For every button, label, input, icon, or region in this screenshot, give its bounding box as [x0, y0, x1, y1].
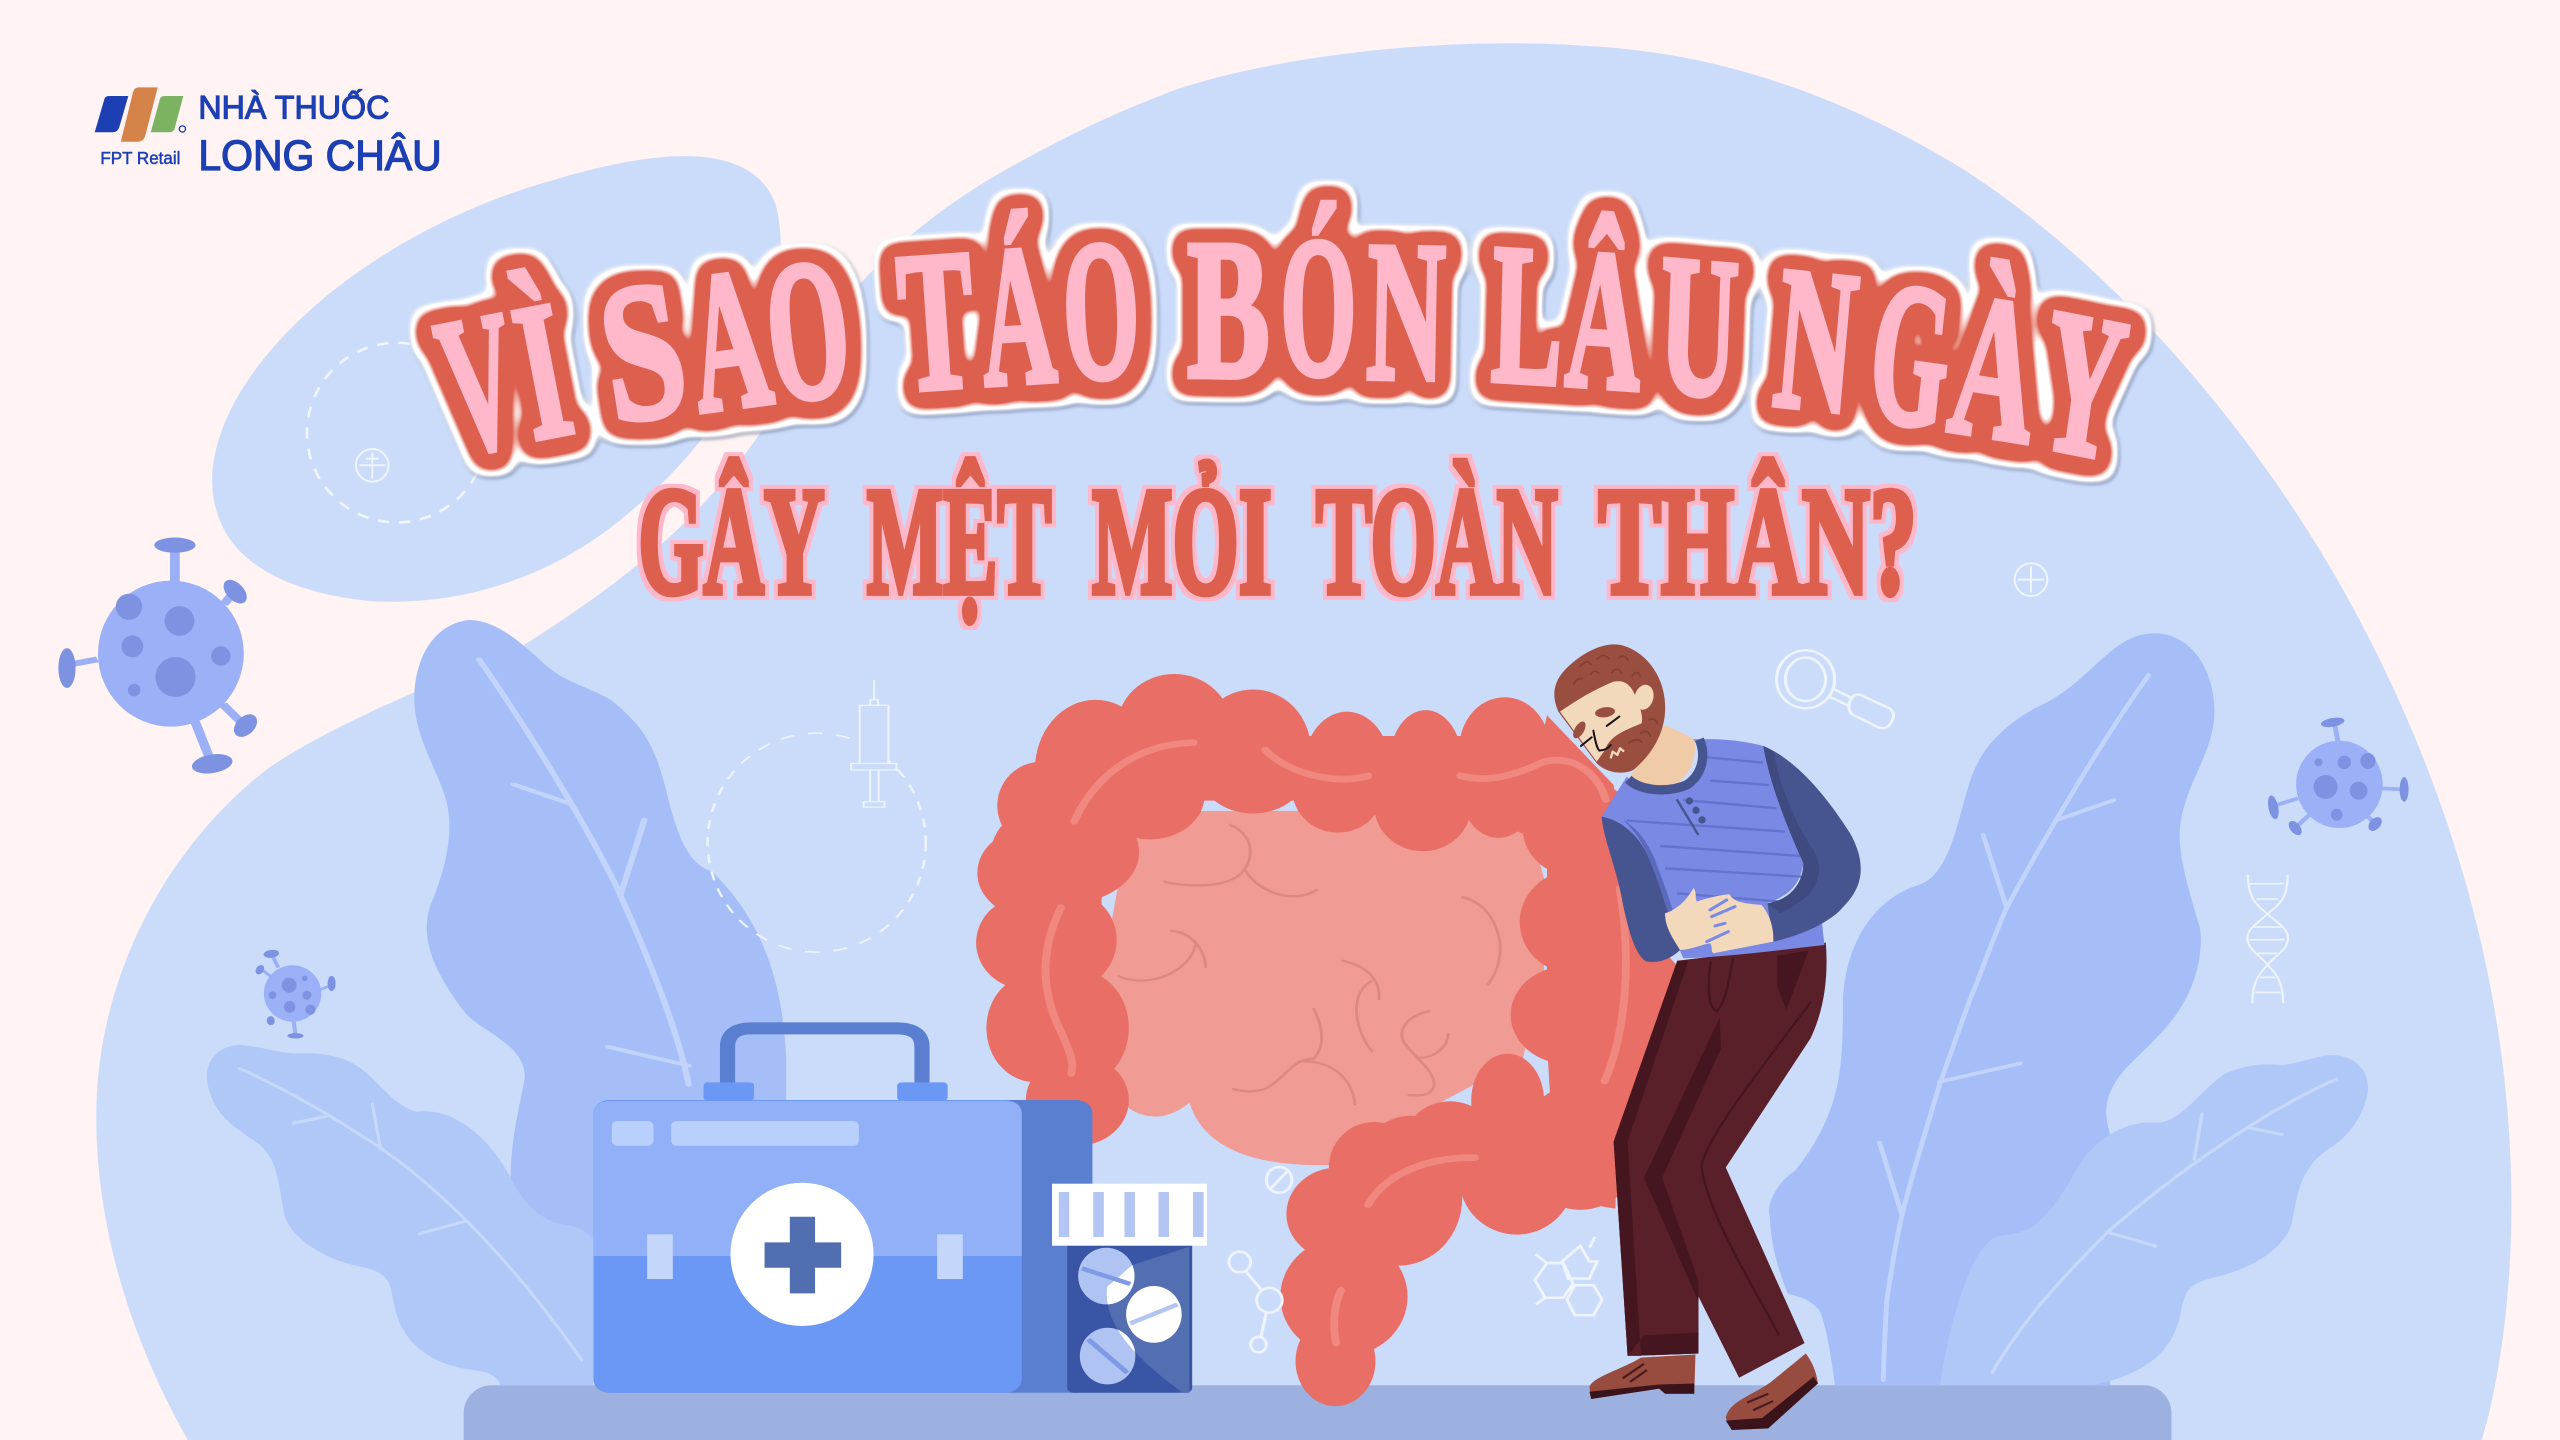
kit latches	[647, 1234, 963, 1279]
head: hair and beard	[1554, 644, 1665, 773]
title arched: Ì	[500, 260, 585, 481]
subtitle	[638, 457, 1917, 627]
title arched: L	[1489, 204, 1565, 428]
colon squiggle folds	[1119, 825, 1500, 1104]
kit front lower	[594, 1100, 1022, 1393]
right shoe	[1726, 1353, 1818, 1430]
title arched: À	[1940, 250, 2050, 486]
subtitle: GÂY	[638, 457, 824, 627]
icon: molecule left	[1229, 1252, 1282, 1352]
handle feet	[704, 1082, 948, 1101]
logo caption: FPT Retail	[100, 148, 180, 168]
head: eyebrows	[1594, 706, 1616, 719]
kit emblem cross	[765, 1217, 841, 1293]
icon: DNA helix	[2247, 875, 2288, 1003]
subtitle: TOÀN	[1316, 457, 1558, 627]
icon: right virus	[2266, 716, 2409, 837]
jar cap bars	[1059, 1192, 1204, 1237]
left sleeve	[1602, 817, 1680, 962]
title arched: A	[677, 227, 781, 455]
left shoe	[1589, 1355, 1695, 1399]
head: hair curls	[1573, 656, 1657, 743]
logo	[95, 87, 442, 179]
sweater torso	[1602, 739, 1824, 958]
right sleeve	[1763, 746, 1861, 942]
illustration: man holding stomach	[1554, 644, 1861, 1430]
logo name line 2: LONG CHÂU	[198, 132, 442, 179]
icon: small virus left	[254, 948, 336, 1039]
title arched: O	[756, 218, 859, 445]
icon: plus badge left	[356, 449, 389, 482]
subtitle: THÂN?	[1598, 457, 1917, 627]
title arched: U	[1656, 212, 1741, 440]
plant: left low leaf	[207, 1045, 593, 1385]
head: ear	[1632, 683, 1656, 712]
pills	[1078, 1248, 1182, 1384]
upper body	[1554, 644, 1861, 962]
title arched	[423, 196, 2137, 504]
title arched: Ó	[1280, 196, 1356, 417]
sweater stripes	[1627, 757, 1802, 902]
neck	[1630, 725, 1695, 792]
title arched: N	[1365, 200, 1447, 423]
plant: left tall leaf	[414, 620, 786, 1381]
illustration: colon	[976, 674, 1677, 1406]
subtitle: MỆT	[867, 457, 1051, 627]
illustration: pill jar	[1052, 1184, 1207, 1393]
jar glare	[1107, 1247, 1189, 1393]
title arched: N	[1768, 225, 1864, 457]
icon: dashed circle with syringe	[708, 680, 926, 952]
head: face	[1560, 681, 1642, 762]
colon inner pink area	[1102, 811, 1544, 1165]
trouser legs	[1614, 943, 1827, 1378]
jar body	[1067, 1240, 1192, 1393]
collar and buttons	[1628, 739, 1703, 790]
trouser shadows	[1614, 950, 1809, 1356]
title arched: G	[1861, 237, 1961, 472]
logo mark	[95, 87, 185, 142]
colon red lumps	[976, 674, 1677, 1406]
logo name line 1: NHÀ THUỐC	[198, 88, 389, 126]
hands	[1665, 888, 1773, 953]
icon: dashed circle upper left	[307, 343, 487, 522]
ground bar	[464, 1385, 2171, 1440]
kit labels	[612, 1121, 859, 1146]
icon: molecule hexagons	[1535, 1237, 1602, 1315]
icon: magnifying glass	[1777, 650, 1893, 728]
illustration: first aid kit	[594, 1028, 1092, 1393]
handle	[728, 1028, 922, 1083]
title arched: S	[587, 239, 699, 465]
colon highlights	[1045, 743, 1626, 1343]
icon: large virus left	[58, 538, 261, 777]
plant: right low leaf	[1940, 1055, 2368, 1385]
title arched: B	[1187, 198, 1270, 419]
closed eyes, nose and mouth	[1581, 717, 1619, 751]
upper-left blob	[212, 156, 781, 602]
title arched: O	[1059, 198, 1143, 422]
title arched: Â	[1563, 207, 1645, 433]
face shading	[1571, 720, 1588, 740]
plant: right tall leaf	[1769, 633, 2214, 1385]
kit front upper	[594, 1101, 1022, 1256]
title arched: V	[423, 270, 535, 496]
trousers and shoes	[1589, 943, 1827, 1430]
kit emblem circle	[730, 1183, 874, 1326]
subtitle: MỎI	[1092, 457, 1272, 627]
title arched: Á	[974, 204, 1061, 429]
title arched: T	[892, 208, 981, 433]
kit side panel	[594, 1100, 1092, 1393]
icon: small pill outline	[1266, 1167, 1292, 1193]
icon: plus badge right	[2015, 563, 2047, 596]
title arched: Y	[2028, 266, 2137, 504]
jar cap	[1052, 1184, 1207, 1246]
